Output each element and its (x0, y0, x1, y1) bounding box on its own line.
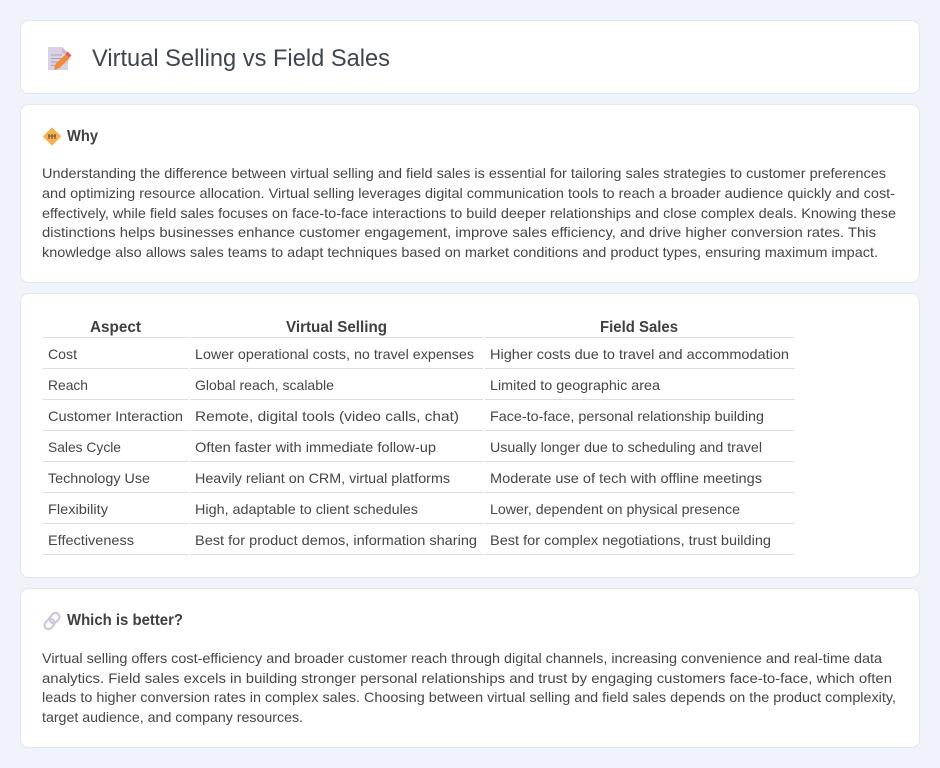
row: reach (48, 377, 660, 393)
row: flexibility: Flexibility (48, 501, 108, 517)
table header: Field Sales (600, 319, 678, 336)
panel: which is better (20, 588, 920, 748)
title: Virtual Selling vs Field Sales (92, 45, 390, 72)
row: cost: Cost (48, 346, 77, 362)
row: flexibility: Lower, dependent on physical presence (490, 501, 740, 517)
row: reach: Limited to geographic area (490, 377, 660, 393)
row: customer interaction: Customer Interaction (48, 408, 183, 424)
text block: which is better: Virtual selling offers cost-efficiency and broader customer reach through digital channels, increasing convenience and real-time data (42, 650, 882, 666)
text block: why: and optimizing resource allocation. Virtual selling leverages digital communication tools to reach a broader audience quickly and cost- (42, 185, 895, 201)
row: effectiveness (48, 532, 771, 548)
row: flexibility: High, adaptable to client schedules (195, 501, 418, 517)
row: technology use: Technology Use (48, 470, 150, 486)
text block: why: Understanding the difference between virtual selling and field sales is essential for tailoring sales strategies to customer preferences (42, 165, 886, 181)
row: customer interaction: Remote, digital tools (video calls, chat) (195, 408, 459, 424)
text block: which is better (42, 650, 896, 725)
table header: Aspect (90, 319, 142, 336)
row: customer interaction (48, 408, 764, 424)
row: technology use: Heavily reliant on CRM, virtual platforms (195, 470, 450, 486)
panel: comparison table (20, 294, 920, 578)
row: technology use (48, 470, 762, 486)
row: cost (48, 346, 789, 362)
icon: orange diamond (44, 128, 60, 145)
icon: document with pencil (48, 47, 72, 70)
icon: link (43, 611, 61, 631)
panel: header (20, 20, 920, 94)
row: cost: Higher costs due to travel and accommodation (490, 346, 789, 362)
heading: why: Why (67, 128, 98, 145)
row: customer interaction: Face-to-face, personal relationship building (490, 408, 764, 424)
panel: why (20, 104, 920, 282)
row: flexibility (48, 501, 740, 517)
row: sales cycle: Usually longer due to scheduling and travel (490, 439, 762, 455)
heading: which is better: Which is better? (67, 612, 183, 629)
text block: which is better: target audience, and company resources. (42, 709, 303, 725)
row: effectiveness: Best for product demos, information sharing (195, 532, 477, 548)
text block: why: distinctions helps businesses enhance customer engagement, improve sales efficiency, and drive higher conversion rates. This (42, 224, 876, 240)
text block: which is better: leads to higher conversion rates in complex sales. Choosing between virtual selling and field sales depends on the product complexity, (42, 689, 896, 705)
table header (90, 319, 678, 336)
row: effectiveness: Best for complex negotiations, trust building (490, 532, 771, 548)
text block: why: knowledge also allows sales teams to adapt techniques based on market conditions and product types, ensuring maximum impact. (42, 244, 878, 260)
table header: Virtual Selling (286, 319, 387, 336)
row: sales cycle: Sales Cycle (48, 439, 121, 455)
row: reach: Reach (48, 377, 88, 393)
row: reach: Global reach, scalable (195, 377, 334, 393)
text block: why (42, 165, 896, 260)
text block: which is better: analytics. Field sales excels in building stronger personal relationships and trust by engaging customers face-to-face, which often (42, 670, 892, 686)
text block: why: effectively, while field sales focuses on face-to-face interactions to build deeper relationships and close complex deals. Knowing these (42, 205, 896, 221)
row: sales cycle (48, 439, 762, 455)
row: technology use: Moderate use of tech with offline meetings (490, 470, 762, 486)
row: cost: Lower operational costs, no travel expenses (195, 346, 474, 362)
row: effectiveness: Effectiveness (48, 532, 134, 548)
row: sales cycle: Often faster with immediate follow-up (195, 439, 436, 455)
